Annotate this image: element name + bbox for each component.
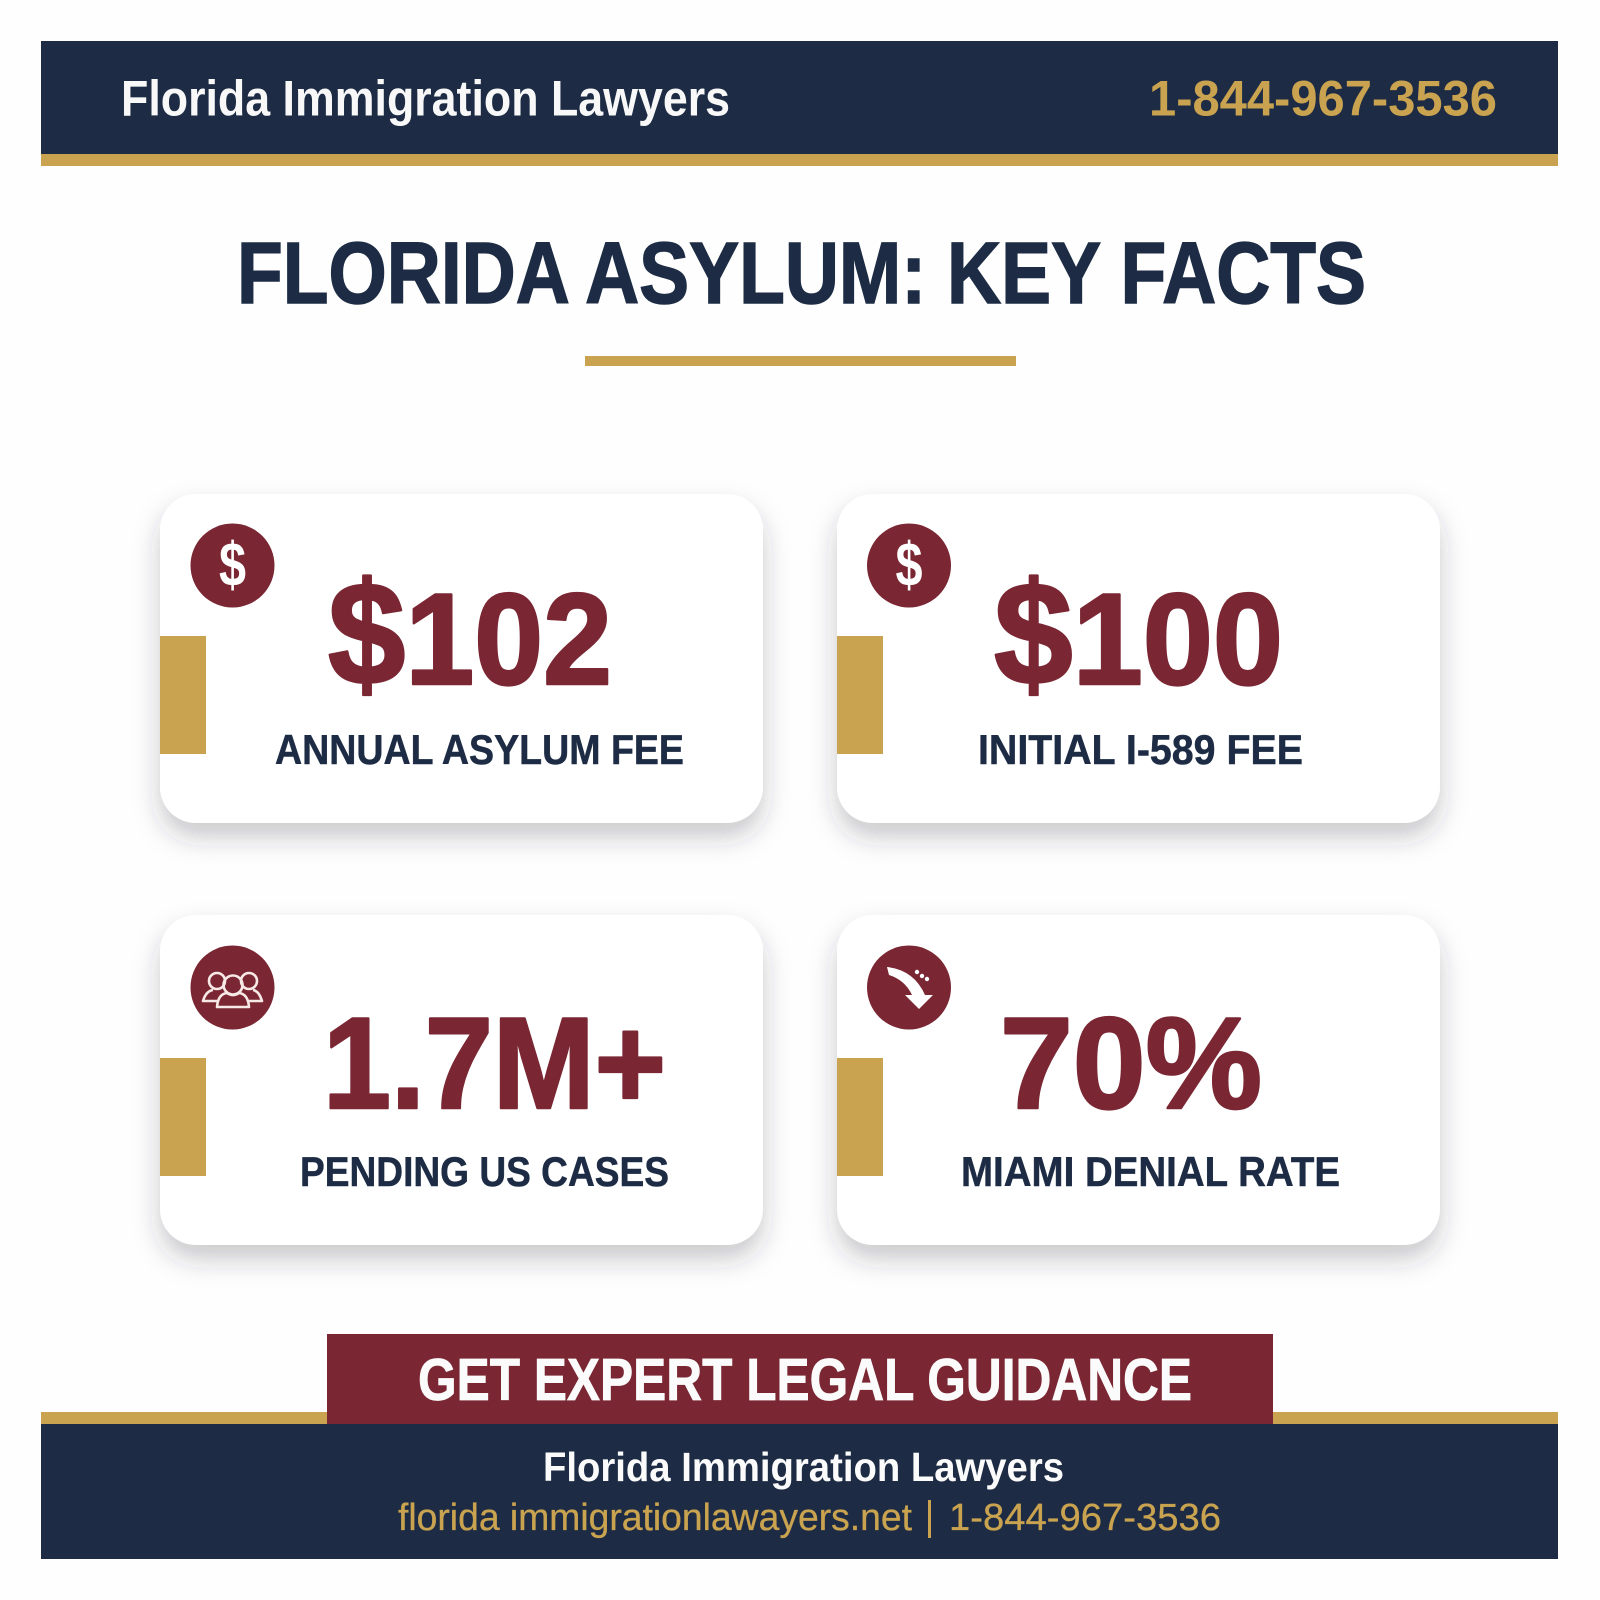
icon: dollar coin [190,524,274,608]
icon: dollar coin: $ [219,531,246,600]
footer contact line [398,1497,1221,1539]
stat value: 1.7M+ [323,990,666,1136]
header firm name: Florida Immigration Lawyers [121,70,730,126]
panel: initial I-589 fee [837,494,1440,823]
footer contact line: florida immigrationlawayers.net [398,1497,912,1539]
stat label: INITIAL I-589 FEE [978,726,1303,773]
header phone number: 1-844-967-3536 [1149,70,1497,126]
icon: dollar coin: $ [896,531,922,600]
stat value: $102 [328,552,612,715]
icon: dollar coin [867,524,951,608]
panel: annual asylum fee [160,494,763,823]
header bar [41,41,1558,166]
title: FLORIDA ASYLUM: KEY FACTS [237,225,1366,322]
stat value: 70% [1000,990,1262,1136]
stat label: ANNUAL ASYLUM FEE [275,726,684,773]
stat value: $100 [994,552,1283,715]
footer band [41,1412,1558,1559]
panel: Miami denial rate [837,915,1440,1245]
stat label: MIAMI DENIAL RATE [961,1148,1340,1195]
call to action banner: GET EXPERT LEGAL GUIDANCE [418,1347,1192,1413]
footer contact line: 1-844-967-3536 [949,1497,1221,1539]
icon: group of people [190,946,274,1030]
icon: falling arrow [867,946,951,1030]
stat label: PENDING US CASES [300,1148,669,1195]
footer firm name: Florida Immigration Lawyers [543,1444,1064,1490]
panel: pending US cases [160,915,763,1245]
call to action banner [327,1334,1273,1424]
